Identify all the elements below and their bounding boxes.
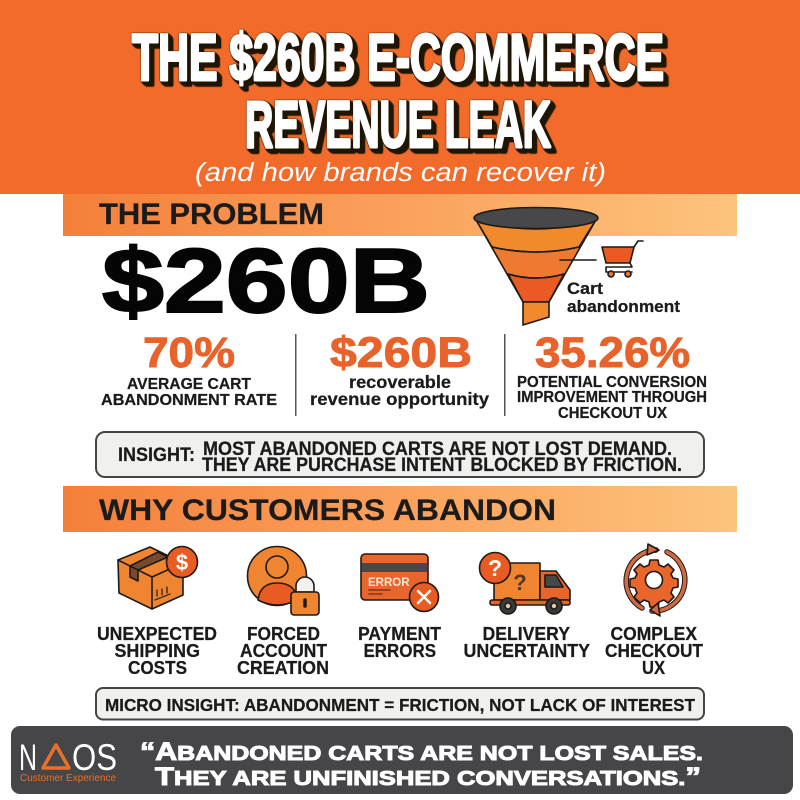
insight callout: MOST ABANDONED CARTS ARE NOT LOST DEMAND. — [203, 439, 672, 460]
icon: payment error card — [361, 554, 438, 612]
label: complex checkout ux: CHECKOUT — [605, 641, 703, 661]
insight callout — [96, 432, 704, 477]
closing quote: “A BANDONED CARTS ARE NOT LOST SALES. — [140, 738, 703, 766]
panel: why customers abandon — [63, 486, 737, 720]
icon: checkout gear cycle — [626, 544, 685, 616]
label: forced account creation — [237, 624, 329, 678]
icon: payment error card: ERROR — [368, 577, 410, 589]
logo: NAOS: Customer Experience — [20, 772, 116, 784]
funnel label — [567, 279, 680, 316]
panel: the problem — [63, 194, 737, 477]
stat: 70% — [101, 329, 277, 409]
label: complex checkout ux: UX — [642, 658, 665, 678]
icon: parcel with dollar: $ — [176, 550, 188, 575]
subtitle: (and how brands can recover it) — [195, 159, 606, 187]
funnel label: Cart — [567, 279, 603, 298]
stat: 35.26%: 35.26% — [535, 329, 690, 377]
label: payment errors: PAYMENT — [358, 624, 441, 644]
label: forced account creation: ACCOUNT — [240, 641, 327, 661]
title: REVENUE LEAK — [245, 87, 551, 161]
section band: why customers abandon — [63, 486, 737, 532]
label: payment errors: ERRORS — [364, 641, 436, 661]
stat: 35.26%: POTENTIAL CONVERSION — [517, 374, 707, 391]
stat: 35.26%: CHECKOUT UX — [558, 405, 668, 422]
stat: $260B: $260B — [330, 329, 472, 377]
label: delivery uncertainty — [464, 624, 590, 661]
micro insight callout: MICRO INSIGHT: ABANDONMENT = FRICTION, NOT LACK OF INTEREST — [105, 695, 695, 715]
icon: funnel — [474, 208, 598, 325]
icon: delivery truck: ? — [513, 570, 527, 595]
label: forced account creation: CREATION — [237, 658, 329, 678]
divider — [504, 334, 506, 416]
heading: why customers abandon: WHY CUSTOMERS ABANDON — [99, 494, 556, 527]
label: delivery uncertainty: UNCERTAINTY — [464, 641, 590, 661]
insight callout: THEY ARE PURCHASE INTENT BLOCKED BY FRICTION. — [202, 455, 682, 476]
stat: 70%: ABANDONMENT RATE — [101, 392, 277, 409]
icon: delivery truck — [480, 552, 570, 614]
label: unexpected shipping costs: COSTS — [128, 658, 187, 678]
stat: $260B: revenue opportunity — [310, 389, 489, 409]
micro insight callout — [96, 688, 704, 720]
logo: NAOS: N — [19, 737, 37, 778]
stat: 35.26%: IMPROVEMENT THROUGH — [517, 389, 707, 406]
funnel label: abandonment — [567, 297, 680, 316]
stat: $260B: recoverable — [349, 372, 451, 392]
stat: 35.26% — [517, 329, 707, 422]
label: payment errors — [358, 624, 441, 661]
label: unexpected shipping costs — [97, 624, 217, 678]
logo: NAOS — [19, 737, 117, 784]
icon: delivery truck: ? — [488, 555, 502, 581]
closing quote — [140, 738, 703, 791]
heading: the problem: THE PROBLEM — [99, 198, 324, 231]
label: forced account creation: FORCED — [247, 624, 320, 644]
stat: 70%: 70% — [143, 329, 235, 377]
big number: $260B — [102, 231, 430, 332]
icon: locked account — [248, 546, 319, 615]
title — [132, 20, 664, 161]
label: complex checkout ux: COMPLEX — [610, 624, 697, 644]
closing quote: THEY ARE UNFINISHED CONVERSATIONS. ” — [155, 763, 701, 791]
icon: parcel with dollar — [118, 546, 198, 609]
footer bar — [11, 726, 793, 794]
insight callout: INSIGHT: — [118, 445, 195, 466]
icon: shopping cart — [602, 241, 643, 277]
label: delivery uncertainty: DELIVERY — [482, 624, 570, 644]
header banner — [0, 0, 800, 194]
logo: NAOS: OS — [72, 737, 117, 778]
label: unexpected shipping costs: UNEXPECTED — [97, 624, 217, 644]
label: unexpected shipping costs: SHIPPING — [114, 641, 200, 661]
stat: 70%: AVERAGE CART — [127, 376, 251, 393]
divider — [295, 334, 296, 416]
stat: $260B — [310, 329, 489, 409]
section band: the problem — [63, 194, 737, 236]
label: complex checkout ux — [605, 624, 703, 678]
